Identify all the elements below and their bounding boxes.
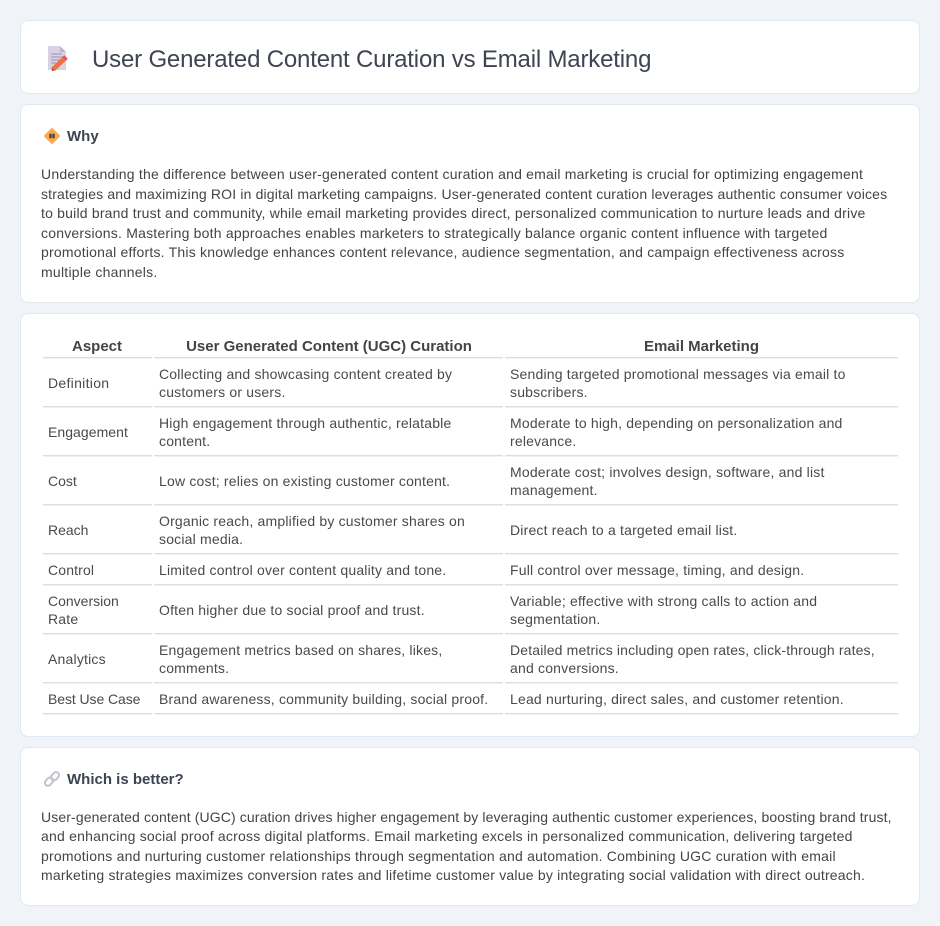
text: multiple channels. bbox=[41, 264, 158, 280]
text: High engagement through authentic, relatable bbox=[159, 415, 451, 431]
row: control bbox=[48, 562, 804, 578]
row: definition bbox=[48, 366, 846, 400]
text: Control bbox=[48, 562, 94, 578]
text: relevance. bbox=[510, 433, 576, 449]
row: conversion rate bbox=[48, 593, 817, 627]
table header row: Email Marketing bbox=[644, 338, 759, 355]
panel: which is better bbox=[20, 747, 920, 906]
text: Detailed metrics including open rates, click-through rates, bbox=[510, 642, 875, 658]
text: Brand awareness, community building, social proof. bbox=[159, 691, 488, 707]
text: management. bbox=[510, 482, 598, 498]
panel: comparison table bbox=[20, 313, 920, 737]
heading: why: Why bbox=[67, 128, 99, 145]
heading: which is better: Which is better? bbox=[67, 771, 184, 788]
panel: header bbox=[20, 20, 920, 94]
text: Variable; effective with strong calls to action and bbox=[510, 593, 817, 609]
text: Moderate cost; involves design, software, and list bbox=[510, 464, 825, 480]
text: Low cost; relies on existing customer content. bbox=[159, 473, 450, 489]
text: segmentation. bbox=[510, 611, 600, 627]
text: Definition bbox=[48, 375, 109, 391]
text: Organic reach, amplified by customer shares on bbox=[159, 513, 465, 529]
text: Rate bbox=[48, 611, 78, 627]
text: conversions. Mastering both approaches enables marketers to strategically balance organic content influence with targeted bbox=[41, 225, 828, 241]
text: Full control over message, timing, and design. bbox=[510, 562, 804, 578]
text: Collecting and showcasing content created by bbox=[159, 366, 452, 382]
text: subscribers. bbox=[510, 384, 588, 400]
text: User-generated content (UGC) curation drives higher engagement by leveraging authentic customer experiences, boosting brand trust, bbox=[41, 809, 892, 825]
table header row bbox=[72, 338, 759, 355]
text: strategies and maximizing ROI in digital marketing campaigns. User-generated content curation leverages authentic consumer voices bbox=[41, 186, 887, 202]
text: marketing strategies maximizes conversion rates and lifetime customer value by integrating social validation with direct outreach. bbox=[41, 867, 865, 883]
text: promotional efforts. This knowledge enhances content relevance, audience segmentation, and campaign effectiveness across bbox=[41, 244, 844, 260]
row: cost bbox=[48, 464, 825, 498]
text: Best Use Case bbox=[48, 691, 140, 707]
icon: link bbox=[44, 771, 60, 787]
row: best use case bbox=[48, 691, 844, 707]
text: Cost bbox=[48, 473, 77, 489]
text: comments. bbox=[159, 660, 229, 676]
text: Understanding the difference between user-generated content curation and email marketing is crucial for optimizing engagement bbox=[41, 166, 863, 182]
row: reach bbox=[48, 513, 737, 547]
text: Analytics bbox=[48, 651, 106, 667]
panel: why bbox=[20, 104, 920, 303]
table header row: Aspect bbox=[72, 338, 122, 355]
table header row: User Generated Content (UGC) Curation bbox=[186, 338, 472, 355]
text: Sending targeted promotional messages via email to bbox=[510, 366, 846, 382]
text: to build brand trust and community, while email marketing provides direct, personalized communication to nurture leads and drive bbox=[41, 205, 866, 221]
icon: warning diamond bbox=[44, 128, 60, 144]
text: Moderate to high, depending on personalization and bbox=[510, 415, 843, 431]
text: and enhancing social proof across digital platforms. Email marketing excels in personalized communication, delivering targeted bbox=[41, 828, 853, 844]
text: Engagement metrics based on shares, likes, bbox=[159, 642, 442, 658]
text: Direct reach to a targeted email list. bbox=[510, 522, 737, 538]
text: promotions and nurturing customer relationships through segmentation and automation. Combining UGC curation with email bbox=[41, 848, 836, 864]
text: Often higher due to social proof and trust. bbox=[159, 602, 425, 618]
text: Reach bbox=[48, 522, 88, 538]
text: Lead nurturing, direct sales, and customer retention. bbox=[510, 691, 844, 707]
row: analytics bbox=[48, 642, 875, 676]
text: Conversion bbox=[48, 593, 119, 609]
text block: which is better bbox=[41, 809, 892, 883]
text: and conversions. bbox=[510, 660, 619, 676]
icon: document with pencil bbox=[48, 46, 68, 71]
text: content. bbox=[159, 433, 210, 449]
text block: why bbox=[41, 166, 887, 280]
title: User Generated Content Curation vs Email Marketing bbox=[92, 46, 651, 73]
row: engagement bbox=[48, 415, 843, 449]
text: social media. bbox=[159, 531, 243, 547]
text: customers or users. bbox=[159, 384, 286, 400]
text: Engagement bbox=[48, 424, 128, 440]
text: Limited control over content quality and tone. bbox=[159, 562, 446, 578]
